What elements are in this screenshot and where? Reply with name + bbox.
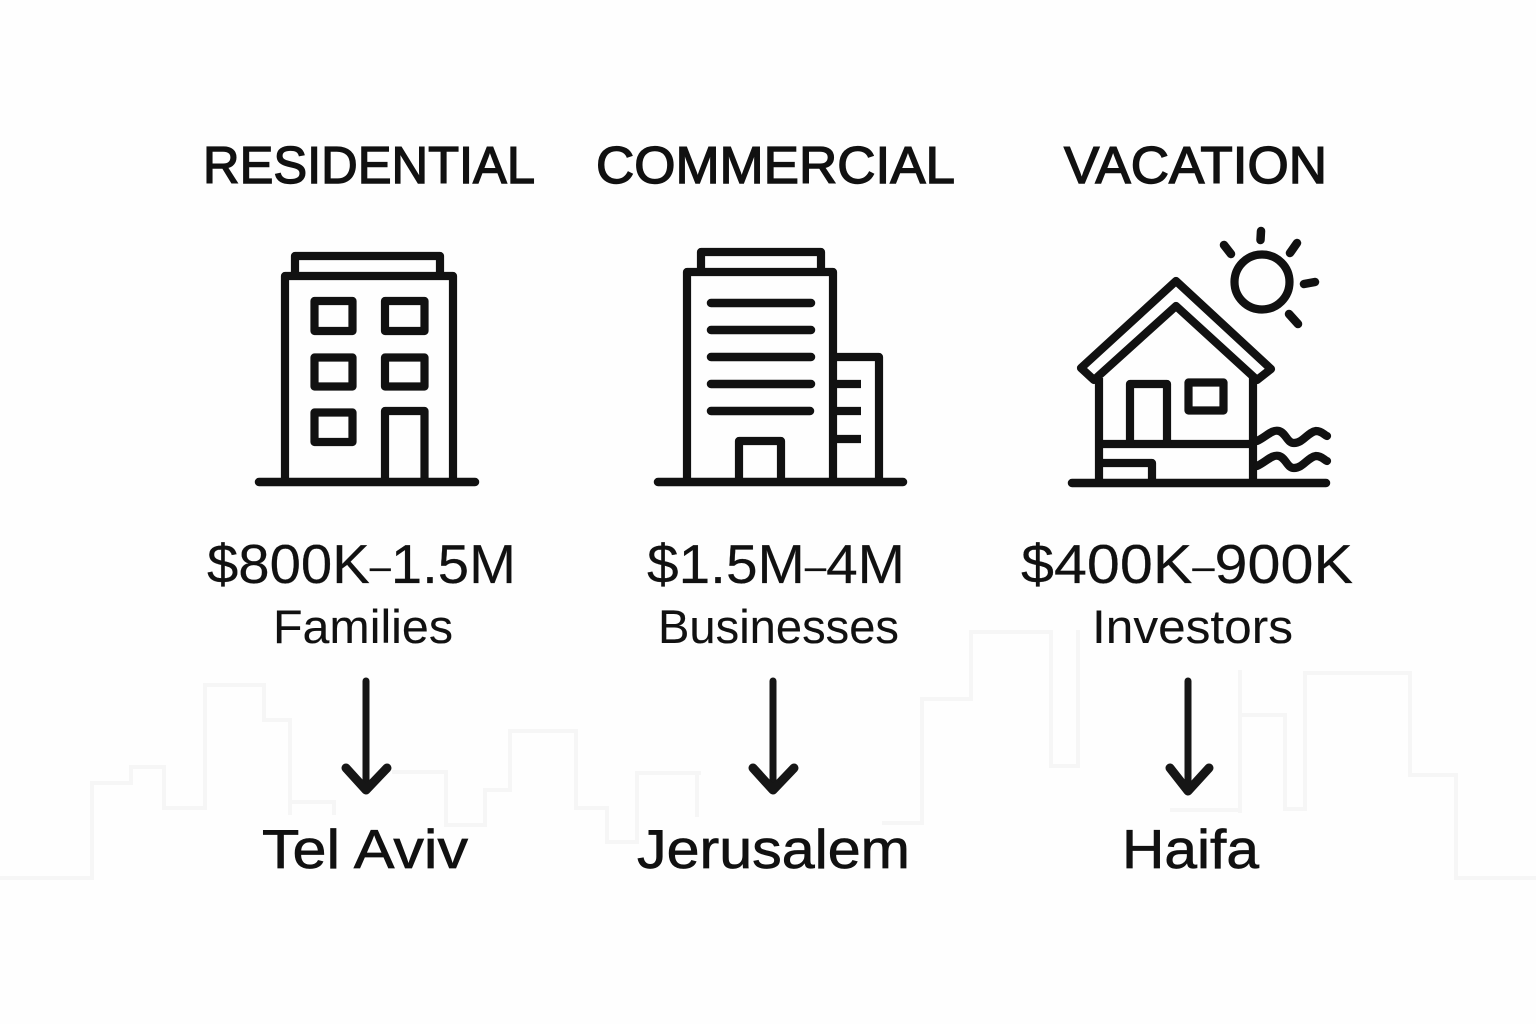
panel: commercial (596, 137, 955, 880)
background skyline (0, 630, 1536, 878)
price: vacation: – (1192, 546, 1215, 587)
city: Jerusalem: Jerusalem (637, 818, 910, 880)
heading: commercial: COMMERCIAL (596, 137, 955, 195)
heading: residential: RESIDENTIAL (203, 137, 535, 195)
icon: beach house with sun and waves (1072, 231, 1327, 483)
price: commercial: 4M (826, 533, 905, 595)
audience: businesses: Businesses (658, 600, 899, 653)
price: residential: 1.5M (391, 533, 516, 595)
panel: residential (203, 137, 535, 880)
city: Tel Aviv: Tel Aviv (262, 818, 469, 880)
price: commercial: $1.5M (647, 533, 800, 595)
price: commercial: – (805, 546, 827, 587)
panel: vacation (1021, 137, 1353, 880)
icon: office tower (658, 252, 903, 482)
audience: families: Families (273, 600, 453, 653)
price: residential: $800K (207, 533, 366, 595)
arrow: commercial to Jerusalem (753, 681, 794, 790)
price: vacation: 900K (1215, 533, 1353, 595)
city: Haifa: Haifa (1122, 818, 1259, 880)
icon: apartment building (259, 256, 475, 482)
audience: investors: Investors (1092, 600, 1293, 653)
price: vacation: $400K (1021, 533, 1180, 595)
arrow: residential to Tel Aviv (346, 681, 387, 790)
price: residential: – (370, 546, 391, 587)
arrow: vacation to Haifa (1170, 681, 1209, 791)
heading: vacation: VACATION (1064, 137, 1327, 195)
